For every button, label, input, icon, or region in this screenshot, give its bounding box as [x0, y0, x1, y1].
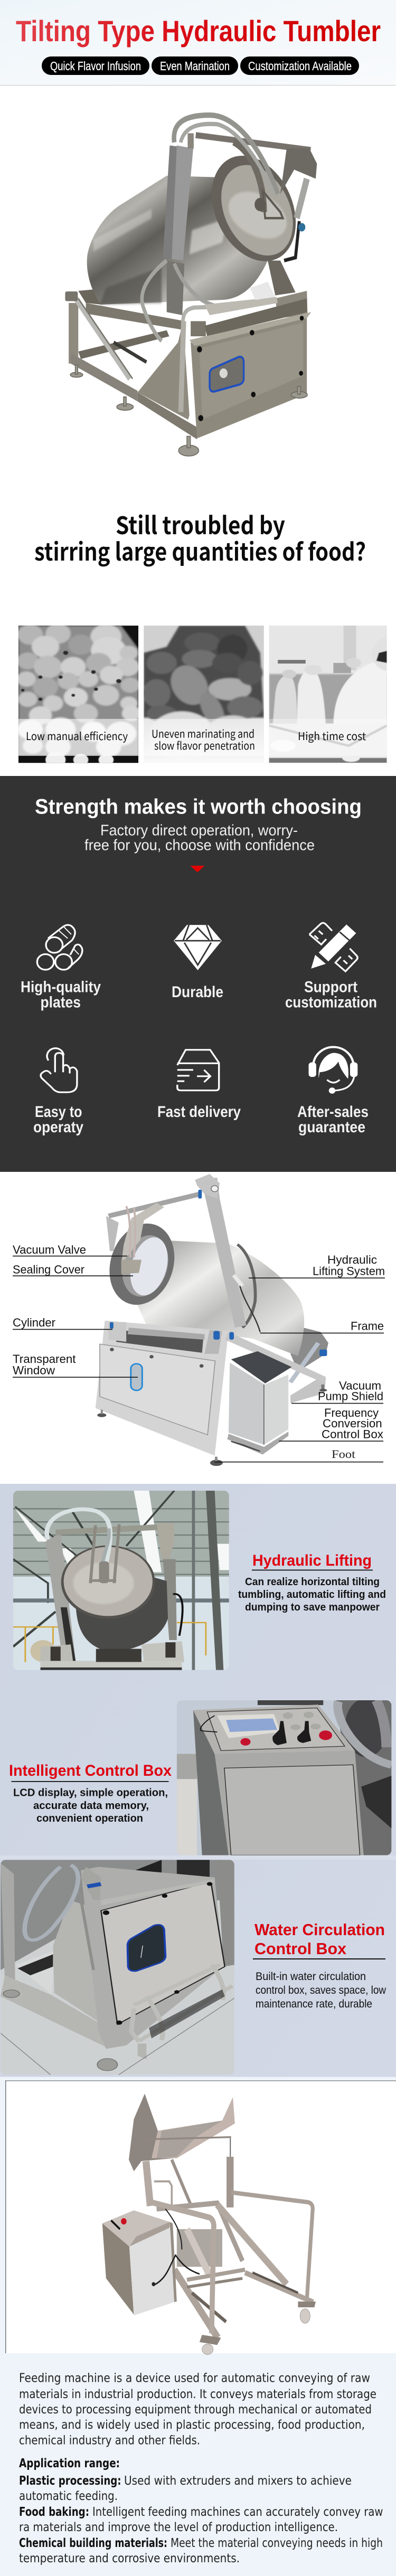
lifting arm: [202, 1178, 246, 1328]
label: frequency conversion control box: [279, 1406, 383, 1442]
feature pills: Customization Available: [248, 59, 352, 73]
top bar: [109, 1194, 200, 1216]
caption: High time cost: [298, 727, 366, 743]
icon: plates: [37, 925, 82, 970]
feet: [3, 1990, 117, 2071]
application range: Used with extruders and mixers to achieve: [124, 2474, 352, 2488]
feeding machine drawing: [102, 2094, 316, 2354]
photo: hydraulic lifting: [13, 1491, 229, 1670]
description: [13, 1787, 168, 1824]
application range: Chemical building materials:: [19, 2536, 167, 2550]
column and top bar: [163, 146, 193, 261]
feet: [70, 365, 307, 456]
panel: water circulation control box: [1, 1860, 386, 2075]
heading: Water Circulation: [254, 1920, 385, 1939]
description: Built-in water circulation: [256, 1971, 366, 1983]
description: Can realize horizontal tilting: [245, 1576, 380, 1588]
heading: Hydraulic Lifting: [252, 1552, 372, 1569]
label: cylinder: Cylinder: [13, 1316, 55, 1329]
rear frame: [290, 1377, 326, 1403]
label: vacuum pump shield: [291, 1379, 383, 1404]
panel: high time cost: [269, 626, 387, 763]
part labels: [13, 1243, 387, 1462]
photo: control box: [177, 1698, 391, 1855]
description: convenient operation: [36, 1813, 143, 1824]
label: hydraulic lifting system: Lifting System: [313, 1265, 385, 1278]
heading: Control Box: [254, 1939, 347, 1958]
caption: Uneven marinating and: [152, 725, 254, 741]
red arrow: [190, 866, 205, 872]
panel: intelligent control box: [9, 1698, 391, 1855]
feature labels: Easy to: [35, 1103, 82, 1121]
label: frequency conversion control box: Control Box: [322, 1427, 383, 1441]
controls: [283, 1712, 320, 1730]
application range: Plastic processing:: [19, 2474, 121, 2488]
panel: feeding machine: [0, 2077, 396, 2576]
description: dumping to save manpower: [245, 1602, 380, 1613]
label: sealing cover: Sealing Cover: [13, 1263, 84, 1276]
control box: [231, 1351, 291, 1384]
machine parts diagram: [96, 1174, 328, 1466]
feature labels: High-quality: [21, 979, 101, 996]
label: frequency conversion control box: Frequency: [324, 1406, 379, 1419]
label: vacuum valve: Vacuum Valve: [13, 1243, 86, 1256]
label: foot: [214, 1447, 387, 1462]
description: accurate data memory,: [33, 1800, 149, 1812]
caption: Low manual efficiency: [26, 727, 128, 743]
label: transparent window: Window: [13, 1363, 55, 1377]
heading: Intelligent Control Box: [9, 1762, 172, 1779]
lid: [195, 136, 313, 281]
label: frame: Frame: [351, 1320, 384, 1333]
icon: diamond: [174, 925, 222, 970]
label: hydraulic lifting system: [249, 1253, 385, 1278]
electrical box: [102, 2210, 169, 2247]
cable: [155, 2255, 200, 2285]
pain point photos: [17, 623, 387, 768]
feature labels: operaty: [33, 1119, 83, 1136]
gusset and beams: [138, 321, 190, 420]
application range: temperature and corrosive environments.: [19, 2552, 240, 2565]
hero machine photo: [65, 115, 317, 456]
description: tumbling, automatic lifting and: [238, 1589, 386, 1600]
panel: uneven marinating: slow flavor penetration: [154, 737, 255, 753]
feet and wheels: [200, 2335, 221, 2345]
sight window: [128, 1925, 165, 1971]
feet: [97, 1410, 223, 1466]
hoses: [174, 115, 278, 194]
label: frequency conversion control box: Conversion: [323, 1417, 382, 1430]
drum: [87, 176, 268, 305]
description: LCD display, simple operation,: [13, 1787, 168, 1799]
front panel: [191, 314, 307, 439]
photo: water circulation box: [1, 1860, 234, 2075]
subheading: Factory direct operation, worry-: [100, 822, 298, 839]
application range: automatic feeding.: [19, 2489, 118, 2503]
panel: strengths: [0, 776, 396, 1172]
transparent window: [131, 1363, 142, 1390]
feature labels: customization: [285, 993, 377, 1011]
LCD: [217, 1714, 280, 1738]
rear frame: [78, 289, 101, 305]
drum body: [136, 1240, 304, 1356]
icon: delivery box: [177, 1050, 219, 1091]
feature pills: [42, 56, 359, 75]
feature labels: Support: [304, 979, 357, 996]
feature labels: Fast delivery: [157, 1103, 241, 1121]
label: hydraulic lifting system: Hydraulic: [327, 1253, 377, 1266]
application range: Application range:: [19, 2457, 120, 2470]
heading: [254, 1920, 385, 1958]
sight window: [210, 357, 244, 392]
frame: [146, 2161, 150, 2206]
problem heading: [34, 507, 366, 568]
description text: [19, 2372, 376, 2447]
panel frame: [81, 1867, 223, 2049]
bolts: [103, 1882, 212, 2025]
label: vacuum pump shield: Vacuum: [339, 1379, 381, 1392]
feature labels: After-sales: [297, 1103, 369, 1121]
drum opening: [101, 1218, 183, 1310]
description: maintenance rate, durable: [256, 1998, 372, 2010]
label: vacuum pump shield: Pump Shield: [318, 1390, 383, 1403]
machine in photo: [45, 1533, 76, 1663]
application range: [19, 2457, 383, 2565]
base frame: [96, 1321, 229, 1456]
feature pills: Quick Flavor Infusion: [50, 59, 141, 73]
feature labels: [21, 979, 377, 1136]
description: [256, 1971, 386, 2010]
gusset: [53, 1900, 97, 2021]
icon: pencil and ruler: [309, 923, 357, 971]
cradle under drum: [204, 297, 278, 315]
heading: Strength makes it worth choosing: [35, 795, 362, 818]
description text: chemical industry and other fields.: [19, 2433, 200, 2447]
panel: hydraulic lifting: [13, 1491, 386, 1670]
icon: tap hand: [41, 1048, 77, 1092]
handle rails: [131, 1965, 232, 2042]
panel: low manual efficiency: [17, 623, 141, 768]
application range: ra materials and improve the level of production intelligence.: [19, 2521, 338, 2534]
subheading: [84, 822, 315, 854]
feature labels: plates: [40, 993, 81, 1011]
header band: [0, 0, 396, 86]
feature pills: Even Marination: [160, 59, 230, 73]
hopper: [129, 2094, 174, 2171]
description: [238, 1576, 386, 1613]
problem heading: Still troubled by: [116, 507, 285, 542]
subheading: free for you, choose with confidence: [84, 837, 315, 854]
feature labels: Durable: [172, 983, 223, 1001]
label: foot: Foot: [332, 1447, 355, 1461]
feature labels: guarantee: [298, 1119, 365, 1136]
label: transparent window: [13, 1352, 138, 1378]
panel: uneven marinating: [143, 626, 264, 763]
application range: Food baking:: [19, 2505, 89, 2519]
cabinet: [193, 1710, 229, 1855]
label: transparent window: Transparent: [13, 1352, 76, 1366]
feature section background: [0, 1484, 396, 2077]
hose ring: [25, 1865, 78, 1940]
hydraulic cylinder: [76, 298, 130, 378]
front panel: [100, 1344, 215, 1435]
icon: headset agent: [309, 1047, 357, 1094]
bolts: [197, 316, 304, 421]
